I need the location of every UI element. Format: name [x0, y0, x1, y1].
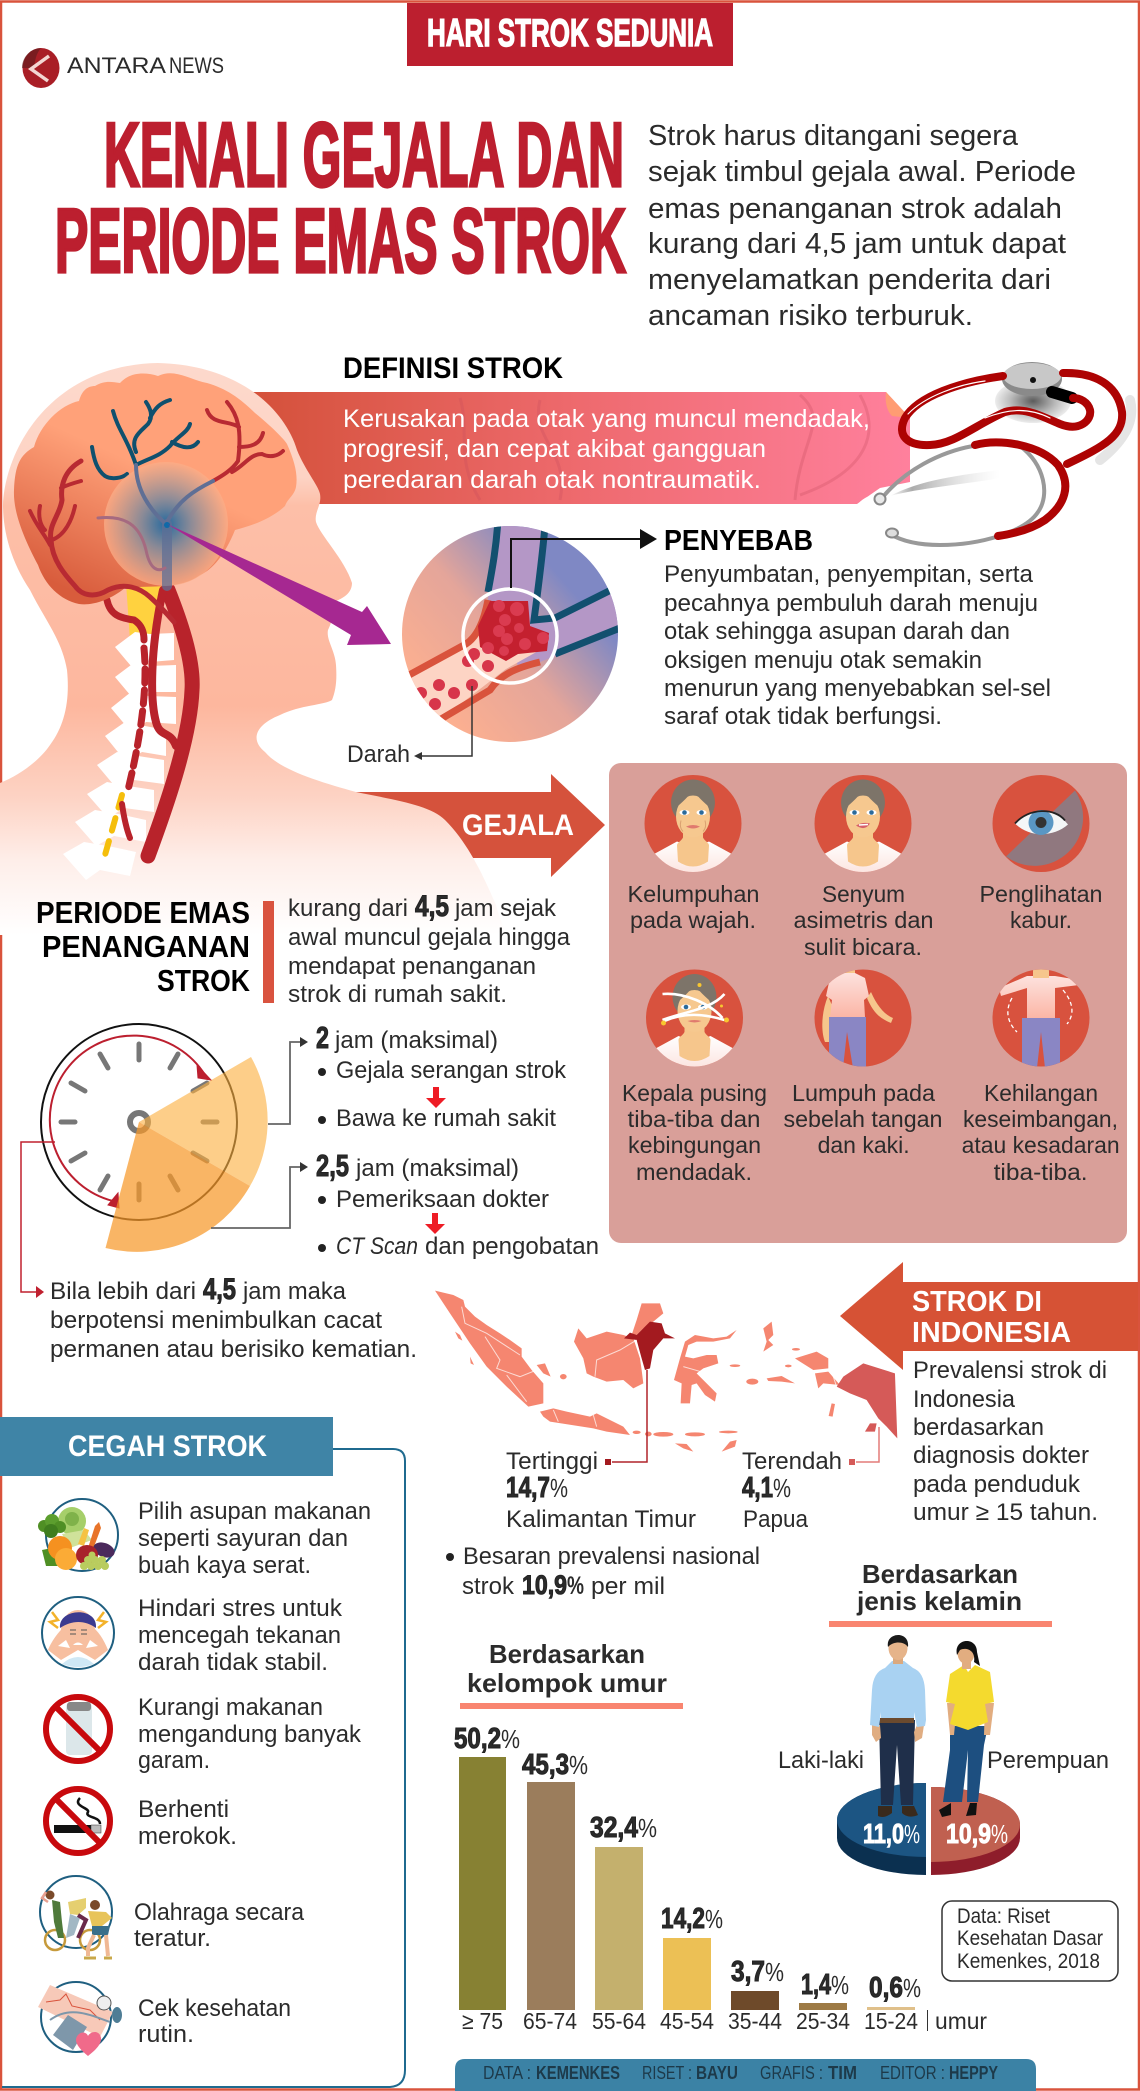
tertinggi stat: 14,7	[506, 1472, 550, 1504]
darah label: Darah	[347, 741, 410, 768]
footer credits: TIM	[828, 2063, 857, 2083]
intro text: emas penanganan strok adalah	[648, 193, 1062, 225]
national prevalence: strok	[462, 1573, 515, 1600]
heading: jenis kelamin: Berdasarkan	[862, 1559, 1018, 1589]
penyebab text	[664, 561, 1051, 730]
cegah items: buah kaya serat.	[138, 1552, 311, 1579]
cegah items: Cek kesehatan	[138, 1995, 291, 2022]
footer credits: DATA :	[483, 2063, 531, 2083]
intro text: Strok harus ditangani segera	[648, 120, 1019, 152]
strok di indonesia arrow	[840, 1262, 1138, 1370]
bar chart: age groups: 45,3	[522, 1749, 569, 1781]
icon: blurred vision	[992, 775, 1090, 872]
symptom labels: atau kesadaran	[962, 1132, 1120, 1158]
symptom labels: mendadak.	[636, 1159, 752, 1185]
title: KENALI GEJALA DAN	[104, 105, 624, 206]
penyebab text: otak sehingga asupan darah dan	[664, 618, 1010, 645]
map leader terendah	[849, 1427, 879, 1465]
brain veins red	[30, 402, 283, 622]
periode emas text: strok di rumah sakit.	[288, 981, 507, 1008]
title	[55, 105, 626, 292]
bar chart: age groups: 0,6	[869, 1972, 903, 2004]
head silhouette	[0, 363, 505, 935]
symptom labels: kabur.	[1010, 907, 1072, 933]
logo	[22, 48, 224, 88]
bar chart: age groups: ≥ 75	[462, 2008, 503, 2034]
cegah items: mengandung banyak	[138, 1721, 362, 1748]
definition banner: progresif, dan cepat akibat gangguan	[343, 435, 766, 463]
timeline 2 jam	[316, 1020, 567, 1132]
leader to penyebab	[511, 529, 657, 588]
periode emas divider bar	[263, 901, 274, 1003]
cegah items: mencegah tekanan	[138, 1622, 341, 1649]
cegah items: rutin.	[138, 2021, 194, 2048]
prevalence text: pada penduduk	[913, 1471, 1081, 1498]
symptom labels: Senyum	[822, 881, 905, 907]
national prevalence	[446, 1543, 760, 1600]
red leader	[21, 1142, 55, 1298]
data source box: Data: Riset	[957, 1905, 1050, 1928]
symptom labels: pada wajah.	[630, 907, 756, 933]
penyebab text: saraf otak tidak berfungsi.	[664, 703, 942, 730]
prevalence text: berdasarkan	[913, 1414, 1044, 1441]
timeline 2,5 jam: dan pengobatan	[425, 1233, 599, 1260]
data source box: Kemenkes, 2018	[957, 1950, 1100, 1973]
periode emas text: 4,5	[415, 890, 449, 923]
timeline 2,5 jam: Pemeriksaan dokter	[336, 1186, 549, 1213]
terendah stat: %	[773, 1473, 791, 1503]
cegah items: garam.	[138, 1747, 210, 1774]
definition banner: Kerusakan pada otak yang muncul mendadak,	[343, 405, 870, 433]
data source box	[942, 1901, 1118, 1981]
bar chart: age groups: 55-64	[592, 2008, 646, 2034]
symptom labels: Kepala pusing	[622, 1080, 767, 1106]
icon: exercise	[40, 1876, 112, 1958]
symptom labels: sebelah tangan	[784, 1106, 942, 1132]
pie labels: 10,9	[946, 1818, 991, 1849]
cegah items: teratur.	[134, 1925, 211, 1952]
bar chart: age groups: 14,2	[661, 1903, 705, 1935]
brain veins blue	[92, 400, 198, 478]
icon: one-sided paralysis	[814, 968, 912, 1068]
prevalence text: diagnosis dokter	[913, 1442, 1089, 1469]
timeline 2,5 jam: jam (maksimal)	[355, 1155, 519, 1182]
intro text: kurang dari 4,5 jam untuk dapat	[648, 228, 1066, 260]
bar chart: age groups: 15-24	[864, 2008, 918, 2034]
pie labels: %	[904, 1819, 920, 1849]
timeline 2 jam: Gejala serangan strok	[336, 1057, 567, 1084]
symptom labels: tiba-tiba.	[994, 1159, 1088, 1185]
icon: no smoking	[46, 1789, 110, 1853]
heading: jenis kelamin	[829, 1559, 1052, 1627]
periode emas heading	[36, 895, 251, 998]
intro text: ancaman risiko terburuk.	[648, 300, 973, 332]
bar chart: age groups	[454, 1723, 987, 2034]
symptom labels: Kelumpuhan	[628, 881, 760, 907]
detail blood vessel circle	[400, 520, 625, 742]
penyebab text: menurun yang menyebabkan sel-sel	[664, 675, 1051, 702]
logo: NEWS	[169, 53, 224, 78]
bar chart: age groups: %	[903, 1973, 921, 2003]
timeline 2,5 jam: 2,5	[316, 1148, 349, 1183]
warning text: 4,5	[203, 1273, 236, 1306]
data source box: Kesehatan Dasar	[957, 1927, 1103, 1950]
symptom labels: tiba-tiba dan	[628, 1106, 760, 1132]
neck yellow area	[126, 583, 165, 640]
national prevalence: %	[567, 1572, 584, 1600]
tertinggi stat: Kalimantan Timur	[506, 1506, 696, 1533]
bar chart: age groups: 50,2	[454, 1723, 501, 1755]
pie labels	[778, 1747, 1109, 1849]
terendah stat: Papua	[743, 1506, 809, 1533]
periode emas text	[288, 890, 570, 1008]
intro text	[648, 120, 1076, 332]
symptom labels: kebingungan	[628, 1132, 761, 1158]
icon: facial paralysis	[644, 775, 742, 884]
panel: cegah strok: CEGAH STROK	[68, 1430, 267, 1463]
prevalence text	[913, 1357, 1107, 1526]
map of indonesia	[435, 1291, 897, 1452]
footer credits: BAYU	[696, 2063, 738, 2083]
icon: no salt	[46, 1697, 110, 1761]
strok di indonesia arrow: STROK DI	[912, 1286, 1042, 1318]
cegah items: darah tidak stabil.	[138, 1649, 328, 1676]
gejala label: GEJALA	[462, 809, 574, 842]
footer credits: HEPPY	[949, 2063, 998, 2083]
definition banner	[250, 392, 910, 504]
warning text: permanen atau berisiko kematian.	[50, 1336, 417, 1363]
cegah items: Berhenti	[138, 1796, 229, 1823]
tertinggi stat	[506, 1448, 696, 1533]
heading: definisi strok: DEFINISI STROK	[343, 352, 563, 385]
penyebab text: Penyumbatan, penyempitan, serta	[664, 561, 1034, 588]
footer credits	[455, 2059, 1036, 2091]
person: woman	[939, 1641, 994, 1817]
prevalence text: umur ≥ 15 tahun.	[913, 1499, 1098, 1526]
national prevalence: Besaran prevalensi nasional	[463, 1543, 760, 1570]
bar chart: age groups: 25-34	[796, 2008, 850, 2034]
cegah items: merokok.	[138, 1823, 237, 1850]
bar chart: age groups: 32,4	[590, 1812, 638, 1844]
warning text: jam maka	[242, 1278, 346, 1305]
bar chart: age groups: umur	[935, 2008, 987, 2034]
icon: fruit and vegetables	[38, 1499, 118, 1571]
bar chart: age groups: %	[765, 1957, 784, 1987]
terendah stat: Terendah	[742, 1448, 842, 1475]
tertinggi stat: Tertinggi	[506, 1448, 598, 1475]
symptom labels: asimetris dan	[794, 907, 934, 933]
icon: loss of balance	[992, 968, 1090, 1068]
warning text	[50, 1273, 417, 1363]
timeline 2,5 jam: CT Scan	[336, 1233, 418, 1260]
stethoscope	[857, 362, 1131, 545]
map leader tertinggi	[605, 1370, 647, 1465]
pie labels: 11,0	[863, 1818, 904, 1849]
gejala arrow	[340, 774, 605, 877]
cegah items: Olahraga secara	[134, 1899, 305, 1926]
stroke glow focus	[98, 462, 228, 586]
icon: health check	[38, 1982, 122, 2056]
bar chart: age groups: 3,7	[731, 1956, 765, 1988]
bar chart: age groups: 45-54	[660, 2008, 714, 2034]
footer credits: KEMENKES	[536, 2063, 620, 2083]
bar chart: age groups: 1,4	[801, 1969, 831, 2001]
bar chart: age groups: 65-74	[523, 2008, 577, 2034]
person: man	[870, 1635, 926, 1817]
symptom labels	[622, 881, 1120, 1185]
bar chart: age groups: %	[638, 1813, 657, 1843]
footer credits: GRAFIS :	[760, 2063, 823, 2083]
cegah items: seperti sayuran dan	[138, 1525, 348, 1552]
cegah items: Kurangi makanan	[138, 1694, 323, 1721]
header ribbon: HARI STROK SEDUNIA	[427, 12, 713, 55]
symptom labels: dan kaki.	[818, 1132, 910, 1158]
bar chart: age groups: %	[569, 1750, 588, 1780]
header ribbon	[407, 3, 733, 66]
pie labels: Laki-laki	[778, 1747, 864, 1774]
periode emas text: mendapat penanganan	[288, 953, 536, 980]
clock leader lines	[211, 1037, 308, 1228]
warning text: berpotensi menimbulkan cacat	[50, 1307, 382, 1334]
periode emas heading: PENANGANAN	[42, 929, 250, 964]
brain	[14, 373, 297, 604]
national prevalence: per mil	[591, 1573, 665, 1600]
symptom labels: Kehilangan	[984, 1080, 1098, 1106]
timeline 2 jam: 2	[316, 1020, 329, 1055]
intro text: sejak timbul gejala awal. Periode	[648, 156, 1076, 188]
strok di indonesia arrow: INDONESIA	[912, 1317, 1071, 1349]
periode emas heading: PERIODE EMAS	[36, 895, 250, 930]
periode emas text: kurang dari	[288, 895, 408, 922]
pie labels: Perempuan	[987, 1747, 1109, 1774]
icon: asymmetric smile	[814, 775, 912, 884]
darah label	[347, 686, 472, 768]
panel: gejala	[609, 763, 1127, 1243]
purple arrow	[167, 524, 391, 645]
spine vertebrae	[63, 632, 176, 880]
bar chart: age groups: %	[831, 1970, 849, 2000]
heading: kelompok umur	[460, 1639, 683, 1709]
timeline 2,5 jam	[316, 1148, 599, 1260]
terendah stat	[742, 1448, 842, 1533]
bar chart: age groups: %	[705, 1904, 723, 1934]
cegah items: Hindari stres untuk	[138, 1595, 343, 1622]
penyebab text: pecahnya pembuluh darah menuju	[664, 590, 1038, 617]
heading: jenis kelamin: jenis kelamin	[856, 1586, 1022, 1616]
bar chart: age groups: 35-44	[728, 2008, 782, 2034]
periode emas text: jam sejak	[454, 895, 557, 922]
periode emas heading: STROK	[157, 963, 251, 998]
periode emas text: awal muncul gejala hingga	[288, 924, 570, 951]
heading: kelompok umur: Berdasarkan	[489, 1639, 645, 1669]
symptom labels: sulit bicara.	[804, 934, 922, 960]
title: PERIODE EMAS STROK	[55, 191, 626, 292]
symptom labels: Penglihatan	[980, 881, 1102, 907]
terendah stat: 4,1	[742, 1472, 773, 1504]
cegah items	[134, 1498, 371, 2048]
neck arteries	[107, 590, 192, 856]
definition banner: peredaran darah otak nontraumatik.	[343, 466, 761, 494]
national prevalence: 10,9	[522, 1570, 567, 1600]
pie chart base	[837, 1783, 1020, 1875]
heading: kelompok umur: kelompok umur	[467, 1668, 667, 1698]
timeline 2 jam: jam (maksimal)	[334, 1027, 498, 1054]
cegah items: Pilih asupan makanan	[138, 1498, 371, 1525]
tertinggi stat: %	[550, 1473, 568, 1503]
warning text: Bila lebih dari	[50, 1278, 196, 1305]
spinal cord	[103, 648, 145, 862]
logo: ANTARA	[67, 53, 166, 78]
intro text: menyelamatkan penderita dari	[648, 264, 1051, 296]
prevalence text: Indonesia	[913, 1386, 1016, 1413]
symptom labels: Lumpuh pada	[792, 1080, 936, 1106]
symptom labels: keseimbangan,	[963, 1106, 1118, 1132]
footer credits: RISET :	[642, 2063, 692, 2083]
pie labels: %	[991, 1819, 1008, 1849]
footer credits: EDITOR :	[880, 2063, 945, 2083]
prevalence text: Prevalensi strok di	[913, 1357, 1107, 1384]
icon: dizziness	[646, 970, 743, 1078]
clock	[41, 1024, 268, 1252]
icon: stress	[42, 1597, 114, 1669]
bar chart: age groups: %	[501, 1724, 520, 1754]
timeline 2 jam: Bawa ke rumah sakit	[336, 1105, 556, 1132]
penyebab heading: PENYEBAB	[664, 525, 813, 557]
penyebab text: oksigen menuju otak semakin	[664, 647, 982, 674]
panel: cegah strok	[0, 1417, 405, 2087]
